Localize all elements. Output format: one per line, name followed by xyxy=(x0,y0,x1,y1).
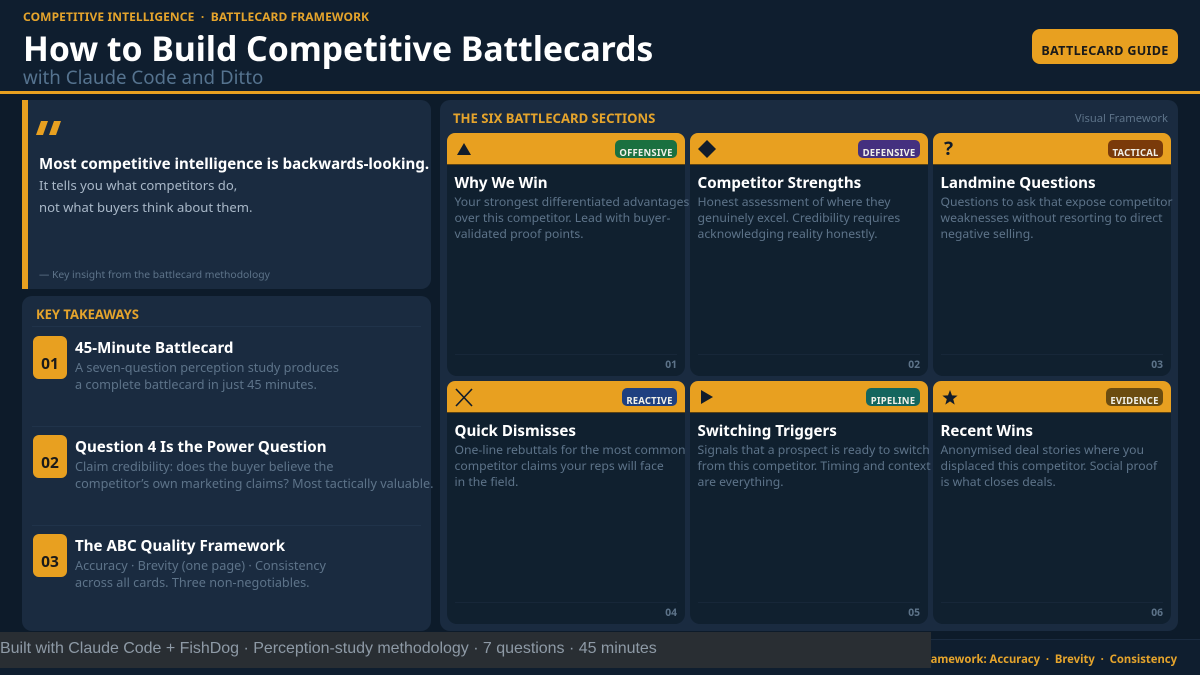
card: switching triggers: Switching Triggers xyxy=(698,421,837,441)
card: switching triggers: Signals that a prospect is ready to switch xyxy=(698,441,930,458)
guide badge xyxy=(1032,29,1178,64)
card: competitor strengths: 02 xyxy=(908,358,920,372)
card: quick dismisses: in the field. xyxy=(454,473,518,490)
card: landmine questions: Landmine Questions xyxy=(940,173,1096,193)
takeaway 1 xyxy=(33,336,339,393)
icon: diamond xyxy=(698,140,716,158)
card: competitor strengths: acknowledging reality honestly. xyxy=(698,225,878,242)
card: recent wins: 06 xyxy=(1151,606,1163,620)
badge: reactive xyxy=(622,388,677,406)
card: why we win xyxy=(447,133,685,376)
header xyxy=(0,0,1200,94)
badge: defensive xyxy=(858,140,920,158)
icon: quote mark xyxy=(36,121,61,135)
takeaway 3: across all cards. Three non-negotiables. xyxy=(75,573,310,591)
card: landmine questions xyxy=(933,133,1171,376)
eyebrow label: COMPETITIVE INTELLIGENCE · BATTLECARD FRAMEWORK xyxy=(23,8,369,25)
section heading: THE SIX BATTLECARD SECTIONS xyxy=(453,109,655,127)
title: How to Build Competitive Battlecards xyxy=(23,25,653,71)
quote body xyxy=(39,176,252,216)
card: quick dismisses: competitor claims your reps will face xyxy=(454,457,664,474)
icon: play xyxy=(701,390,713,404)
icon: triangle xyxy=(457,143,471,155)
card: competitor strengths: Competitor Strengths xyxy=(698,173,861,193)
guide badge: BATTLECARD GUIDE xyxy=(1041,42,1169,59)
footer bar xyxy=(0,639,1200,675)
takeaway 3: The ABC Quality Framework xyxy=(75,536,285,556)
footer framework text: ABC Quality Framework: Accuracy · Brevity · Consistency xyxy=(850,652,1177,667)
card: recent wins xyxy=(933,381,1171,624)
panel: key takeaways xyxy=(22,296,431,631)
quote body: not what buyers think about them. xyxy=(39,198,252,216)
takeaway 2: competitor’s own marketing claims? Most tactically valuable. xyxy=(75,474,434,492)
card: quick dismisses: 04 xyxy=(665,606,677,620)
card: why we win: validated proof points. xyxy=(454,225,584,242)
card: why we win: 01 xyxy=(665,358,677,372)
card: landmine questions: negative selling. xyxy=(940,225,1033,242)
takeaway 2: Claim credibility: does the buyer believe the xyxy=(75,457,333,475)
card: quick dismisses: Quick Dismisses xyxy=(454,421,576,441)
subtitle: with Claude Code and Ditto xyxy=(23,65,263,90)
card: recent wins: displaced this competitor. Social proof xyxy=(940,457,1157,474)
icon: cross xyxy=(456,388,472,406)
quote body: It tells you what competitors do, xyxy=(39,176,237,194)
card: switching triggers: 05 xyxy=(908,606,920,620)
badge: offensive xyxy=(615,140,677,158)
card: recent wins: Anonymised deal stories where you xyxy=(940,441,1144,458)
card: why we win: Why We Win xyxy=(454,173,548,193)
attribution strip xyxy=(0,632,931,668)
card: recent wins: is what closes deals. xyxy=(940,473,1056,490)
takeaway 1: A seven-question perception study produces xyxy=(75,358,339,376)
takeaway 3 xyxy=(33,534,326,591)
attribution strip: Built with Claude Code + FishDog · Perception-study methodology · 7 questions · 45 minutes xyxy=(0,640,657,657)
card: quick dismisses xyxy=(447,381,685,624)
icon: question mark: ? xyxy=(944,135,953,161)
card: switching triggers: are everything. xyxy=(698,473,783,490)
icon: star xyxy=(942,390,958,405)
takeaways heading: KEY TAKEAWAYS xyxy=(36,305,139,323)
card: quick dismisses: One-line rebuttals for the most common xyxy=(454,441,686,458)
card: switching triggers: from this competitor. Timing and context xyxy=(698,457,931,474)
quote attribution: — Key insight from the battlecard methodology xyxy=(39,268,270,282)
takeaway 2: 02 xyxy=(41,451,59,473)
card: landmine questions: Questions to ask that expose competitor xyxy=(940,193,1173,210)
card: competitor strengths: genuinely excel. Credibility requires xyxy=(698,209,900,226)
takeaway 1: 01 xyxy=(41,352,59,374)
panel: quote xyxy=(22,100,431,289)
card: landmine questions: 03 xyxy=(1151,358,1163,372)
takeaway 2: Question 4 Is the Power Question xyxy=(75,437,327,457)
badge: pipeline xyxy=(866,388,920,406)
panel: six battlecard sections xyxy=(440,100,1178,631)
card: landmine questions: weaknesses without resorting to direct xyxy=(940,209,1163,226)
takeaway 3: Accuracy · Brevity (one page) · Consistency xyxy=(75,556,326,574)
badge: evidence xyxy=(1106,388,1163,406)
takeaway 1: 45-Minute Battlecard xyxy=(75,338,233,358)
takeaway 3: 03 xyxy=(41,550,59,572)
card: competitor strengths: Honest assessment of where they xyxy=(698,193,890,210)
card: why we win: Your strongest differentiated advantages xyxy=(454,193,689,210)
quote headline: Most competitive intelligence is backwards-looking. xyxy=(39,154,429,174)
section note: Visual Framework xyxy=(1075,111,1168,126)
card: switching triggers xyxy=(690,381,928,624)
card: competitor strengths xyxy=(690,133,928,376)
card: recent wins: Recent Wins xyxy=(940,421,1033,441)
badge: tactical xyxy=(1108,140,1163,158)
takeaway 2 xyxy=(33,435,434,492)
card: why we win: over this competitor. Lead with buyer- xyxy=(454,209,670,226)
takeaway 1: a complete battlecard in just 45 minutes. xyxy=(75,375,317,393)
